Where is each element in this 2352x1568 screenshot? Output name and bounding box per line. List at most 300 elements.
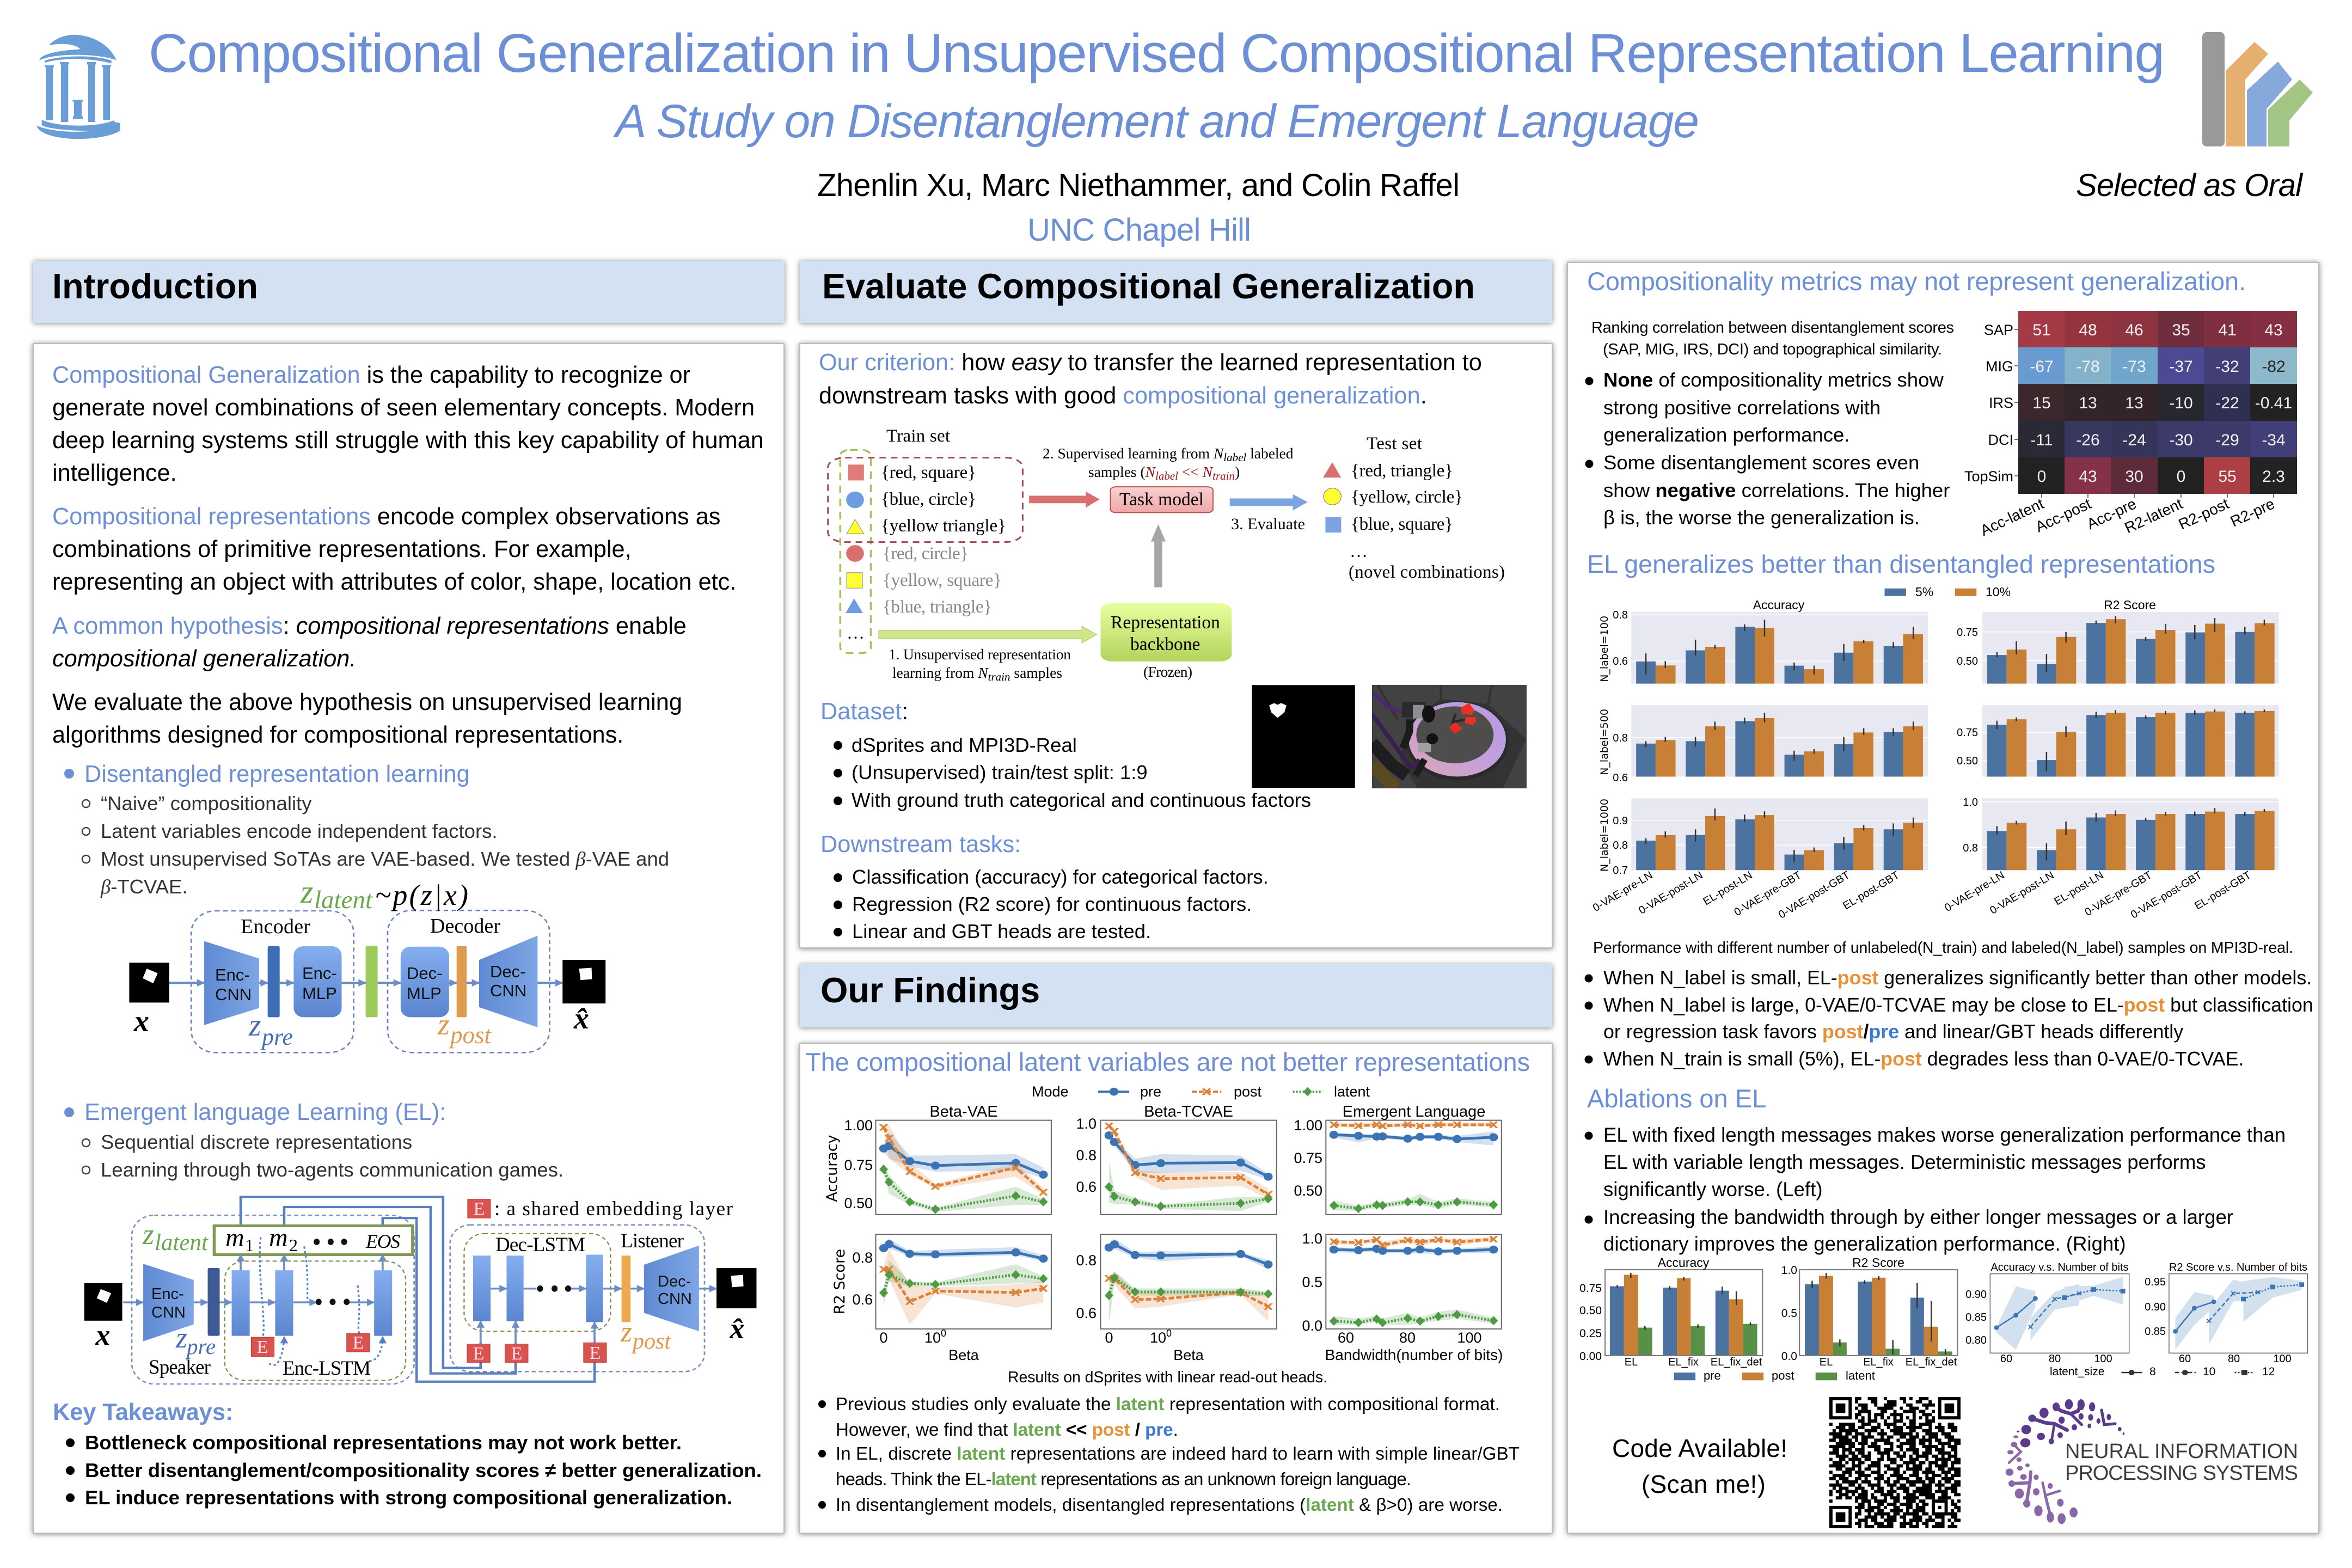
- heatmap: ranking correlation: -34: [2262, 431, 2286, 449]
- diagram: VAE encoder decoder architecture: Enc-: [215, 965, 250, 984]
- bullet list: disentangled representation learning: β-TCVAE.: [100, 875, 187, 898]
- heatmap: ranking correlation: R2-latent: [2122, 495, 2185, 536]
- legend: train percent: [1885, 589, 1976, 596]
- bar charts: performance by N_label: 0.8: [1613, 732, 1628, 744]
- heatmap: ranking correlation: Acc-latent: [1978, 495, 2047, 539]
- diagram: emergent language speaker listener architecture: post: [631, 1329, 671, 1354]
- bar charts: ablation accuracy and R2: latent: [1846, 1369, 1875, 1382]
- bullet list: metrics findings: Some disentanglement scores even: [1603, 451, 1919, 474]
- text block: key takeaways: Better disentanglement/compositionality scores ≠ better generalization.: [85, 1459, 762, 1481]
- line charts: accuracy and R2 vs beta and bandwidth: 1.0: [1302, 1230, 1322, 1247]
- bar charts: ablation accuracy and R2: 0.50: [1579, 1304, 1602, 1317]
- diagram: VAE encoder decoder architecture: MLP: [407, 984, 442, 1003]
- heatmap: ranking correlation: 35: [2172, 321, 2190, 339]
- diagram: emergent language speaker listener architecture: CNN: [658, 1290, 692, 1308]
- bar charts: ablation accuracy and R2: EL: [1625, 1356, 1638, 1368]
- heading: Introduction: [33, 261, 785, 323]
- logo: NeurIPS: [2006, 1399, 2298, 1524]
- diagram: emergent language speaker listener architecture: Dec-LSTM: [495, 1234, 585, 1256]
- bullet list: EL vs VAE findings: When N_label is small, EL-post generalizes significantly better than other models.: [1603, 967, 2312, 989]
- section heading: latent variables finding: The compositional latent variables are not better representations: [805, 1048, 1530, 1076]
- line charts: accuracy and R2 vs beta and bandwidth: 0.8: [1076, 1147, 1097, 1163]
- line charts: accuracy and R2 vs number of bits: 0.85: [1965, 1312, 1987, 1324]
- line charts: accuracy and R2 vs beta and bandwidth: 1.00: [1294, 1117, 1322, 1134]
- bullet list: ablations: dictionary improves the generalization performance. (Right): [1603, 1233, 2126, 1255]
- section heading: compositionality metrics: Compositionality metrics may not represent generalization.: [1587, 267, 2246, 296]
- bar charts: performance by N_label: 0-VAE-pre-GBT: [2083, 869, 2154, 918]
- chart: Beta-VAE accuracy: [876, 1120, 1051, 1215]
- diagram: train test evaluation flow: samples (N: [1088, 463, 1155, 480]
- bullet list: findings: heads. Think the EL-latent representations as an unknown foreign language.: [836, 1469, 1411, 1490]
- bullet list: emergent language learning: Learning through two-agents communication games.: [101, 1159, 564, 1181]
- diagram: train test evaluation flow: backbone: [1130, 634, 1200, 654]
- text block: intro paragraphs: Compositional Generalization is the capability to recognize or: [52, 362, 690, 388]
- bar charts: performance by N_label: EL-post-GBT: [2192, 869, 2253, 912]
- line charts: accuracy and R2 vs beta and bandwidth: 0.75: [1294, 1150, 1322, 1166]
- bar charts: ablation accuracy and R2: 1.0: [1781, 1264, 1797, 1277]
- bullet list: findings: In disentanglement models, disentangled representations (latent & β>0) are worse.: [836, 1495, 1503, 1515]
- line charts: accuracy and R2 vs beta and bandwidth: Beta: [948, 1347, 979, 1363]
- diagram: emergent language speaker listener architecture: Enc-: [151, 1285, 184, 1303]
- diagram: train test evaluation flow: {blue, circle}: [881, 489, 976, 509]
- image: dSprites sample: [1252, 685, 1355, 788]
- bar charts: performance by N_label: 0.6: [1613, 656, 1628, 667]
- heatmap: ranking correlation: -22: [2215, 394, 2239, 412]
- text block: intro paragraphs: algorithms designed for compositional representations.: [52, 722, 623, 748]
- bullet list: disentangled representation learning: “Naive” compositionality: [101, 792, 312, 814]
- bullet list: metrics findings: generalization performance.: [1603, 424, 1849, 446]
- title: Compositional Generalization in Unsupervised Compositional Representation Learning: [149, 23, 2165, 84]
- diagram: emergent language speaker listener architecture: [84, 1197, 756, 1384]
- diagram: emergent language speaker listener architecture: Speaker: [149, 1356, 211, 1379]
- diagram: VAE encoder decoder architecture: latent: [314, 886, 373, 914]
- chart: Beta-VAE R2: [876, 1234, 1051, 1329]
- line charts: accuracy and R2 vs beta and bandwidth: 0: [941, 1328, 946, 1339]
- text block: dataset: dSprites and MPI3D-Real: [852, 734, 1077, 756]
- bullet list: findings: Previous studies only evaluate the latent representation with compositional format.: [836, 1394, 1500, 1414]
- text block: intro paragraphs: generate novel combinations of seen elementary concepts. Modern: [52, 395, 755, 421]
- diagram: VAE encoder decoder architecture: x: [133, 1004, 149, 1038]
- diagram: VAE encoder decoder architecture: Enc-: [302, 964, 337, 983]
- text block: downstream tasks: Downstream tasks:: [820, 831, 1021, 857]
- panel: right column results: [1567, 262, 2319, 1533]
- heatmap: ranking correlation: R2-pre: [2228, 495, 2277, 530]
- heading: Evaluate Compositional Generalization: [800, 261, 1552, 323]
- line charts: accuracy and R2 vs number of bits: 80: [2228, 1353, 2240, 1365]
- line charts: accuracy and R2 vs beta and bandwidth: Beta: [1173, 1347, 1204, 1363]
- callout: code available: Code Available!: [1612, 1434, 1787, 1462]
- line charts: accuracy and R2 vs beta and bandwidth: 0.8: [1076, 1252, 1097, 1269]
- bar charts: performance by N_label: 0.8: [1613, 840, 1628, 852]
- line charts: accuracy and R2 vs number of bits: 0.80: [1965, 1334, 1987, 1346]
- bar charts: performance by N_label: 0.50: [1957, 656, 1978, 667]
- diagram: VAE encoder decoder architecture: Encoder: [241, 915, 310, 938]
- logo: NeurIPS: NEURAL INFORMATION: [2065, 1440, 2298, 1463]
- diagram: emergent language speaker listener architecture: Dec-: [658, 1273, 691, 1290]
- diagram: emergent language speaker listener architecture: E: [257, 1337, 268, 1357]
- bar charts: performance by N_label: 5%: [1915, 585, 1933, 599]
- text block: key takeaways: Bottleneck compositional representations may not work better.: [85, 1431, 682, 1454]
- text block: intro paragraphs: [52, 362, 764, 748]
- heatmap: ranking correlation: 46: [2125, 321, 2143, 339]
- bar charts: performance by N_label: 0.75: [1957, 727, 1978, 739]
- text block: dataset: [820, 699, 1311, 811]
- diagram: train test evaluation flow: (Frozen): [1143, 663, 1192, 680]
- diagram: train test evaluation flow: <<: [1178, 463, 1203, 480]
- line charts: accuracy and R2 vs beta and bandwidth: 60: [1338, 1330, 1354, 1346]
- line charts: accuracy and R2 vs beta and bandwidth: 10: [924, 1330, 941, 1346]
- line charts: accuracy and R2 vs number of bits: R2 Score v.s. Number of bits: [2169, 1261, 2307, 1273]
- text block: intro paragraphs: combinations of primitive representations. For example,: [52, 536, 632, 562]
- diagram: emergent language speaker listener architecture: latent: [155, 1230, 209, 1255]
- diagram: VAE encoder decoder architecture: ~p(z|x): [375, 879, 468, 911]
- diagram: train test evaluation flow: {red, circle}: [883, 544, 969, 564]
- bar charts: performance by N_label: 0.8: [1963, 842, 1978, 854]
- legend: mode: latent: [1334, 1083, 1370, 1100]
- heatmap: ranking correlation: 0: [2037, 468, 2046, 486]
- diagram: train test evaluation flow: …: [847, 623, 865, 643]
- bar charts: ablation accuracy and R2: post: [1772, 1369, 1794, 1382]
- heatmap: ranking correlation: -26: [2076, 431, 2100, 449]
- bar charts: performance by N_label: Accuracy: [1753, 598, 1805, 612]
- heatmap: ranking correlation: DCI: [1988, 432, 2013, 448]
- bar charts: ablation accuracy and R2: EL: [1820, 1356, 1833, 1368]
- line charts: accuracy and R2 vs beta and bandwidth: 0.6: [1076, 1179, 1097, 1195]
- diagram: VAE encoder decoder architecture: z: [248, 1007, 261, 1043]
- bar charts: ablation accuracy and R2: [1579, 1255, 1957, 1382]
- bar charts: ablation accuracy and R2: EL_fix_det: [1711, 1356, 1762, 1368]
- heatmap: ranking correlation: -11: [2030, 431, 2053, 449]
- diagram: emergent language speaker listener architecture: Enc-LSTM: [283, 1357, 371, 1380]
- diagram: emergent language speaker listener architecture: EOS: [365, 1230, 400, 1252]
- bar charts: performance by N_label: 0.9: [1613, 815, 1628, 827]
- callout: code available: [1612, 1434, 1787, 1498]
- line charts: accuracy and R2 vs beta and bandwidth: 0: [879, 1330, 888, 1346]
- panel: our findings: [800, 1044, 1552, 1533]
- diagram: train test evaluation flow: train: [988, 670, 1010, 683]
- panel: introduction: [33, 344, 784, 1533]
- diagram: emergent language speaker listener architecture: m: [225, 1223, 244, 1252]
- oral badge: Selected as Oral: [2076, 168, 2304, 203]
- panel: evaluate compositional generalization: [800, 344, 1552, 948]
- text block: dataset: With ground truth categorical and continuous factors: [852, 789, 1311, 811]
- bullet list: ablations: EL with fixed length messages makes worse generalization performance than: [1603, 1124, 2286, 1146]
- diagram: VAE encoder decoder architecture: z: [437, 1008, 450, 1042]
- heatmap: ranking correlation: 55: [2218, 468, 2237, 486]
- section heading: EL generalizes better: EL generalizes better than disentangled representations: [1587, 550, 2215, 578]
- line charts: accuracy and R2 vs beta and bandwidth: 0.6: [1076, 1305, 1097, 1321]
- diagram: train test evaluation flow: Train set: [886, 426, 950, 446]
- line charts: accuracy and R2 vs number of bits: 0.95: [2145, 1276, 2166, 1288]
- plot backgrounds: [1631, 612, 2279, 870]
- text block: dataset: Dataset:: [820, 699, 908, 725]
- heading: Introduction: Introduction: [52, 266, 258, 306]
- heatmap: ranking correlation: 30: [2125, 468, 2143, 486]
- diagram: emergent language speaker listener architecture: : a shared embedding layer: [494, 1198, 733, 1220]
- legend: mode: [1032, 1083, 1370, 1100]
- bullet list: metrics findings: show negative correlations. The higher: [1603, 479, 1950, 501]
- heading: Our Findings: [800, 964, 1552, 1027]
- line charts: accuracy and R2 vs number of bits: 0.90: [2145, 1301, 2166, 1313]
- bar charts: performance by N_label: 0.50: [1957, 755, 1978, 767]
- line charts: accuracy and R2 vs beta and bandwidth: Accuracy: [824, 1135, 841, 1202]
- heatmap: ranking correlation: -73: [2122, 358, 2146, 376]
- diagram: emergent language speaker listener architecture: m: [269, 1223, 288, 1252]
- heatmap: ranking correlation: IRS: [1989, 395, 2013, 411]
- text block: intro paragraphs: intelligence.: [52, 460, 177, 486]
- heatmap: ranking correlation: -82: [2262, 358, 2286, 376]
- image: MPI3D-Real scene: [1372, 685, 1527, 788]
- caption: dSprites results: Results on dSprites with linear read-out heads.: [1008, 1369, 1327, 1386]
- heatmap: ranking correlation: 0: [2177, 468, 2185, 486]
- heatmap: ranking correlation: -30: [2169, 431, 2193, 449]
- text block: key takeaways: Key Takeaways:: [53, 1399, 233, 1425]
- legend: mode: post: [1234, 1083, 1262, 1100]
- heatmap: ranking correlation: 13: [2125, 394, 2143, 412]
- icon: QR code: [1829, 1397, 1961, 1528]
- callout: code available: (Scan me!): [1641, 1470, 1766, 1498]
- diagram: VAE encoder decoder architecture: Decoder: [430, 915, 500, 938]
- text block: ranking correlation caption: Ranking correlation between disentanglement scores: [1591, 319, 1954, 336]
- chart: Beta-TCVAE accuracy: [1100, 1120, 1277, 1215]
- text block: intro paragraphs: representing an object with attributes of color, shape, location etc.: [52, 569, 736, 595]
- bar charts: performance by N_label: 10%: [1986, 585, 2011, 599]
- text block: downstream tasks: Regression (R2 score) for continuous factors.: [852, 893, 1252, 915]
- bar charts: performance by N_label: 0-VAE-post-GBT: [1777, 869, 1852, 921]
- caption: MPI3D performance: Performance with different number of unlabeled(N_train) and labeled(N_label) samples on MPI3D-real.: [1593, 939, 2293, 957]
- heatmap: ranking correlation: -29: [2215, 431, 2239, 449]
- bar charts: performance by N_label: EL-post-LN: [1701, 869, 1755, 908]
- bar charts: ablation accuracy and R2: 0.00: [1579, 1350, 1602, 1363]
- diagram: emergent language speaker listener architecture: E: [474, 1199, 485, 1219]
- text block: key takeaways: EL induce representations with strong compositional generalization.: [85, 1486, 732, 1509]
- bar charts: ablation accuracy and R2: 0.0: [1781, 1350, 1797, 1363]
- diagram: train test evaluation flow: [828, 426, 1505, 683]
- diagram: train test evaluation flow: {blue, triangle}: [883, 597, 992, 617]
- bar charts: performance by N_label: N_label=100: [1598, 616, 1610, 682]
- line charts: accuracy and R2 vs beta and bandwidth: 100: [1457, 1330, 1482, 1346]
- diagram: train test evaluation flow: train: [1212, 469, 1235, 482]
- heatmap: ranking correlation: [1964, 311, 2297, 539]
- line charts: accuracy and R2 vs beta and bandwidth: 0.5: [1302, 1274, 1322, 1290]
- diagram: train test evaluation flow: label: [1155, 469, 1178, 482]
- bar charts: performance by N_label: 0.75: [1957, 627, 1978, 639]
- chart: Beta-TCVAE R2: [1100, 1234, 1277, 1329]
- diagram: emergent language speaker listener architecture: E: [353, 1333, 364, 1353]
- bullet list: findings: [818, 1394, 1520, 1515]
- bar charts: performance by N_label: 0-VAE-post-LN: [1988, 869, 2056, 917]
- legend: mode: Mode: [1032, 1083, 1069, 1100]
- diagram: emergent language speaker listener architecture: pre: [185, 1334, 216, 1359]
- line charts: accuracy and R2 vs beta and bandwidth: 0: [1166, 1328, 1172, 1339]
- text block: our criterion: [819, 350, 1482, 409]
- diagram: train test evaluation flow: learning from N: [892, 664, 988, 681]
- heatmap: ranking correlation: 41: [2218, 321, 2237, 339]
- bar charts: performance by N_label: 1.0: [1963, 797, 1978, 808]
- bullet list: disentangled representation learning: Disentangled representation learning: [84, 761, 470, 787]
- diagram: train test evaluation flow: label: [1223, 451, 1246, 464]
- line charts: accuracy and R2 vs number of bits: 0.85: [2145, 1326, 2166, 1338]
- bullet list: metrics findings: strong positive correlations with: [1603, 396, 1881, 419]
- bar charts: performance by N_label: 0-VAE-pre-LN: [1591, 869, 1655, 914]
- bar charts: ablation accuracy and R2: EL_fix_det: [1906, 1356, 1957, 1368]
- diagram: train test evaluation flow: 3. Evaluate: [1231, 515, 1305, 533]
- diagram: train test evaluation flow: 2. Supervised learning from N: [1043, 445, 1223, 462]
- line charts: accuracy and R2 vs beta and bandwidth: Bandwidth(number of bits): [1325, 1346, 1503, 1363]
- diagram: train test evaluation flow: {blue, square}: [1351, 514, 1453, 534]
- icon: colored bars logo: [2202, 32, 2313, 146]
- bullet list: emergent language learning: Sequential discrete representations: [101, 1131, 412, 1153]
- bar charts: performance by N_label: EL-post-LN: [2053, 869, 2106, 908]
- bullet list: emergent language learning: [64, 1099, 564, 1181]
- diagram: train test evaluation flow: {red, square}: [881, 463, 976, 482]
- diagram: VAE encoder decoder architecture: post: [449, 1021, 492, 1049]
- bar charts: performance by N_label: 0-VAE-pre-LN: [1943, 869, 2007, 914]
- line charts: accuracy and R2 vs number of bits: Accuracy v.s. Number of bits: [1990, 1261, 2129, 1273]
- affiliation: UNC Chapel Hill: [1027, 212, 1251, 248]
- authors: Zhenlin Xu, Marc Niethammer, and Colin Raffel: [817, 168, 1460, 203]
- diagram: train test evaluation flow: ): [1235, 463, 1240, 480]
- diagram: train test evaluation flow: samples: [1010, 664, 1062, 681]
- heatmap: ranking correlation: 48: [2079, 321, 2097, 339]
- diagram: train test evaluation flow: {yellow, square}: [883, 571, 1002, 590]
- line charts: accuracy and R2 vs number of bits: 80: [2049, 1353, 2061, 1365]
- diagram: VAE encoder decoder architecture: pre: [260, 1024, 293, 1050]
- bullet list: metrics findings: [1585, 369, 1950, 529]
- line charts: accuracy and R2 vs beta and bandwidth: 1.00: [844, 1117, 873, 1134]
- line charts: accuracy and R2 vs beta and bandwidth: 80: [1399, 1330, 1416, 1346]
- heatmap: ranking correlation: R2-post: [2176, 495, 2232, 533]
- text block: our criterion: downstream tasks with good compositional generalization.: [819, 383, 1427, 409]
- heatmap: ranking correlation: 51: [2032, 321, 2051, 339]
- chart: emergent language R2: [1326, 1234, 1502, 1329]
- heatmap: ranking correlation: 15: [2032, 394, 2051, 412]
- line charts: accuracy and R2 vs beta and bandwidth: 0.8: [852, 1250, 873, 1266]
- heading: Evaluate Compositional Generalization: Evaluate Compositional Generalization: [822, 266, 1475, 306]
- bullet list: ablations: significantly worse. (Left): [1603, 1178, 1823, 1200]
- line charts: accuracy and R2 vs number of bits: 60: [2000, 1353, 2012, 1365]
- bar charts: performance by N_label: [1591, 585, 2279, 921]
- diagram: emergent language speaker listener architecture: z: [142, 1218, 154, 1251]
- line charts: accuracy and R2 vs beta and bandwidth: 0.0: [1302, 1318, 1322, 1334]
- bar charts: performance by N_label: 0.8: [1613, 609, 1628, 621]
- diagram: VAE encoder decoder architecture: x̂: [573, 1002, 589, 1036]
- bullet list: findings: However, we find that latent << post / pre.: [836, 1420, 1178, 1440]
- bullet list: findings: In EL, discrete latent representations are indeed hard to learn with simple linear/GBT: [836, 1444, 1520, 1464]
- bullet list: emergent language learning: Emergent language Learning (EL):: [84, 1099, 446, 1125]
- bullet list: EL vs VAE findings: When N_train is small (5%), EL-post degrades less than 0-VAE/0-TCVAE.: [1603, 1048, 2244, 1070]
- diagram: train test evaluation flow: Test set: [1367, 434, 1422, 454]
- bullet list: EL vs VAE findings: or regression task favors post/pre and linear/GBT heads differently: [1603, 1021, 2183, 1043]
- line charts: accuracy and R2 vs number of bits: 8: [2149, 1365, 2156, 1378]
- bullet list: disentangled representation learning: Latent variables encode independent factors.: [101, 820, 498, 842]
- line charts: accuracy and R2 vs beta and bandwidth: 0.50: [1294, 1183, 1322, 1199]
- line charts: accuracy and R2 vs beta and bandwidth: 0.50: [844, 1195, 873, 1211]
- diagram: train test evaluation flow: Representation: [1111, 612, 1220, 633]
- text block: ranking correlation caption: (SAP, MIG, IRS, DCI) and topographical similarity.: [1603, 341, 1942, 358]
- line charts: accuracy and R2 vs number of bits: 0.90: [1965, 1289, 1987, 1301]
- bullet list: disentangled representation learning: Most unsupervised SoTAs are VAE-based. We tested β-VAE and: [101, 848, 669, 870]
- line charts: accuracy and R2 vs number of bits: 60: [2179, 1353, 2191, 1365]
- heatmap: ranking correlation: TopSim: [1964, 468, 2013, 485]
- bar charts: ablation accuracy and R2: 0.25: [1579, 1327, 1602, 1340]
- line charts: accuracy and R2 vs number of bits: 10: [2203, 1365, 2215, 1378]
- diagram: train test evaluation flow: N: [1202, 463, 1214, 480]
- bar charts: ablation accuracy and R2: Accuracy: [1658, 1255, 1710, 1270]
- line charts: accuracy and R2 vs beta and bandwidth: Emergent Language: [1343, 1103, 1485, 1120]
- line charts: accuracy and R2 vs beta and bandwidth: 0: [1105, 1330, 1113, 1346]
- heatmap: ranking correlation: MIG: [1986, 358, 2013, 375]
- heatmap: ranking correlation: -0.41: [2255, 394, 2292, 412]
- diagram: emergent language speaker listener architecture: 1: [245, 1235, 254, 1255]
- diagram: train test evaluation flow: Task model: [1119, 489, 1204, 510]
- diagram: train test evaluation flow: labeled: [1246, 445, 1294, 462]
- heatmap: ranking correlation: Acc-pre: [2084, 495, 2139, 532]
- bar charts: performance by N_label: 0.6: [1613, 772, 1628, 784]
- text block: dataset: (Unsupervised) train/test split: 1:9: [852, 761, 1148, 783]
- line charts: accuracy and R2 vs number of bits: [1965, 1261, 2307, 1378]
- heatmap: ranking correlation: 2.3: [2262, 468, 2285, 486]
- heatmap: ranking correlation: SAP: [1984, 322, 2013, 338]
- diagram: VAE encoder decoder architecture: CNN: [490, 981, 526, 1000]
- bar charts: ablation accuracy and R2: R2 Score: [1852, 1255, 1904, 1270]
- diagram: emergent language speaker listener architecture: x̂: [730, 1312, 745, 1345]
- text block: downstream tasks: [820, 831, 1269, 942]
- line charts: accuracy and R2 vs beta and bandwidth: R2 Score: [831, 1249, 848, 1314]
- heatmap: ranking correlation: -78: [2076, 358, 2100, 376]
- diagram: VAE encoder decoder architecture: Dec-: [490, 962, 525, 981]
- diagram: train test evaluation flow: {yellow, circle}: [1351, 487, 1463, 507]
- diagram: VAE encoder decoder architecture: z: [300, 874, 313, 910]
- diagram: emergent language speaker listener architecture: z: [620, 1315, 632, 1348]
- heatmap: ranking correlation: Acc-post: [2033, 495, 2094, 535]
- bar charts: ablation accuracy and R2: EL_fix: [1863, 1356, 1894, 1368]
- diagram: emergent language speaker listener architecture: x: [95, 1319, 110, 1351]
- heatmap: ranking correlation: 43: [2079, 468, 2097, 486]
- heatmap: ranking correlation: -67: [2030, 358, 2054, 376]
- text block: intro paragraphs: deep learning systems still struggle with this key capability of human: [52, 427, 764, 454]
- diagram: VAE encoder decoder architecture: [129, 874, 605, 1052]
- line charts: accuracy and R2 vs beta and bandwidth: 1.0: [1076, 1116, 1097, 1132]
- bullet list: ablations: EL with variable length messages. Deterministic messages performs: [1603, 1151, 2206, 1173]
- line charts: accuracy and R2 vs beta and bandwidth: Beta-TCVAE: [1144, 1103, 1233, 1120]
- line charts: accuracy and R2 vs number of bits: 100: [2094, 1353, 2112, 1365]
- icon: UNC Old Well logo: [36, 35, 120, 139]
- bar charts: ablation accuracy and R2: EL_fix: [1668, 1356, 1699, 1368]
- bar charts: performance by N_label: N_label=1000: [1598, 799, 1610, 872]
- text block: intro paragraphs: Compositional representations encode complex observations as: [52, 504, 720, 530]
- bar charts: performance by N_label: 0.7: [1613, 865, 1628, 877]
- diagram: emergent language speaker listener architecture: CNN: [151, 1304, 186, 1321]
- diagram: emergent language speaker listener architecture: E: [590, 1343, 601, 1363]
- bullet list: metrics findings: None of compositionality metrics show: [1603, 369, 1944, 391]
- bar charts: performance by N_label: N_label=500: [1598, 709, 1610, 775]
- text block: intro paragraphs: A common hypothesis: compositional representations enable: [52, 613, 687, 639]
- diagram: VAE encoder decoder architecture: Dec-: [407, 964, 442, 983]
- subtitle: A Study on Disentanglement and Emergent Language: [612, 95, 1699, 148]
- diagram: train test evaluation flow: {yellow triangle}: [881, 516, 1006, 536]
- heatmap: ranking correlation: -24: [2122, 431, 2146, 449]
- line charts: accuracy and R2 vs beta and bandwidth: 10: [1150, 1330, 1166, 1346]
- heatmap: ranking correlation: -32: [2215, 358, 2239, 376]
- bullet list: ablations: Increasing the bandwidth through by either longer messages or a larger: [1603, 1206, 2233, 1228]
- text block: intro paragraphs: compositional generalization.: [52, 646, 356, 672]
- text block: key takeaways: [53, 1399, 762, 1509]
- diagram: VAE encoder decoder architecture: CNN: [215, 985, 252, 1004]
- text block: our criterion: Our criterion: how easy to transfer the learned representation to: [819, 350, 1482, 376]
- logo: NeurIPS: PROCESSING SYSTEMS: [2065, 1462, 2298, 1485]
- bullet list: EL vs VAE findings: [1584, 967, 2313, 1070]
